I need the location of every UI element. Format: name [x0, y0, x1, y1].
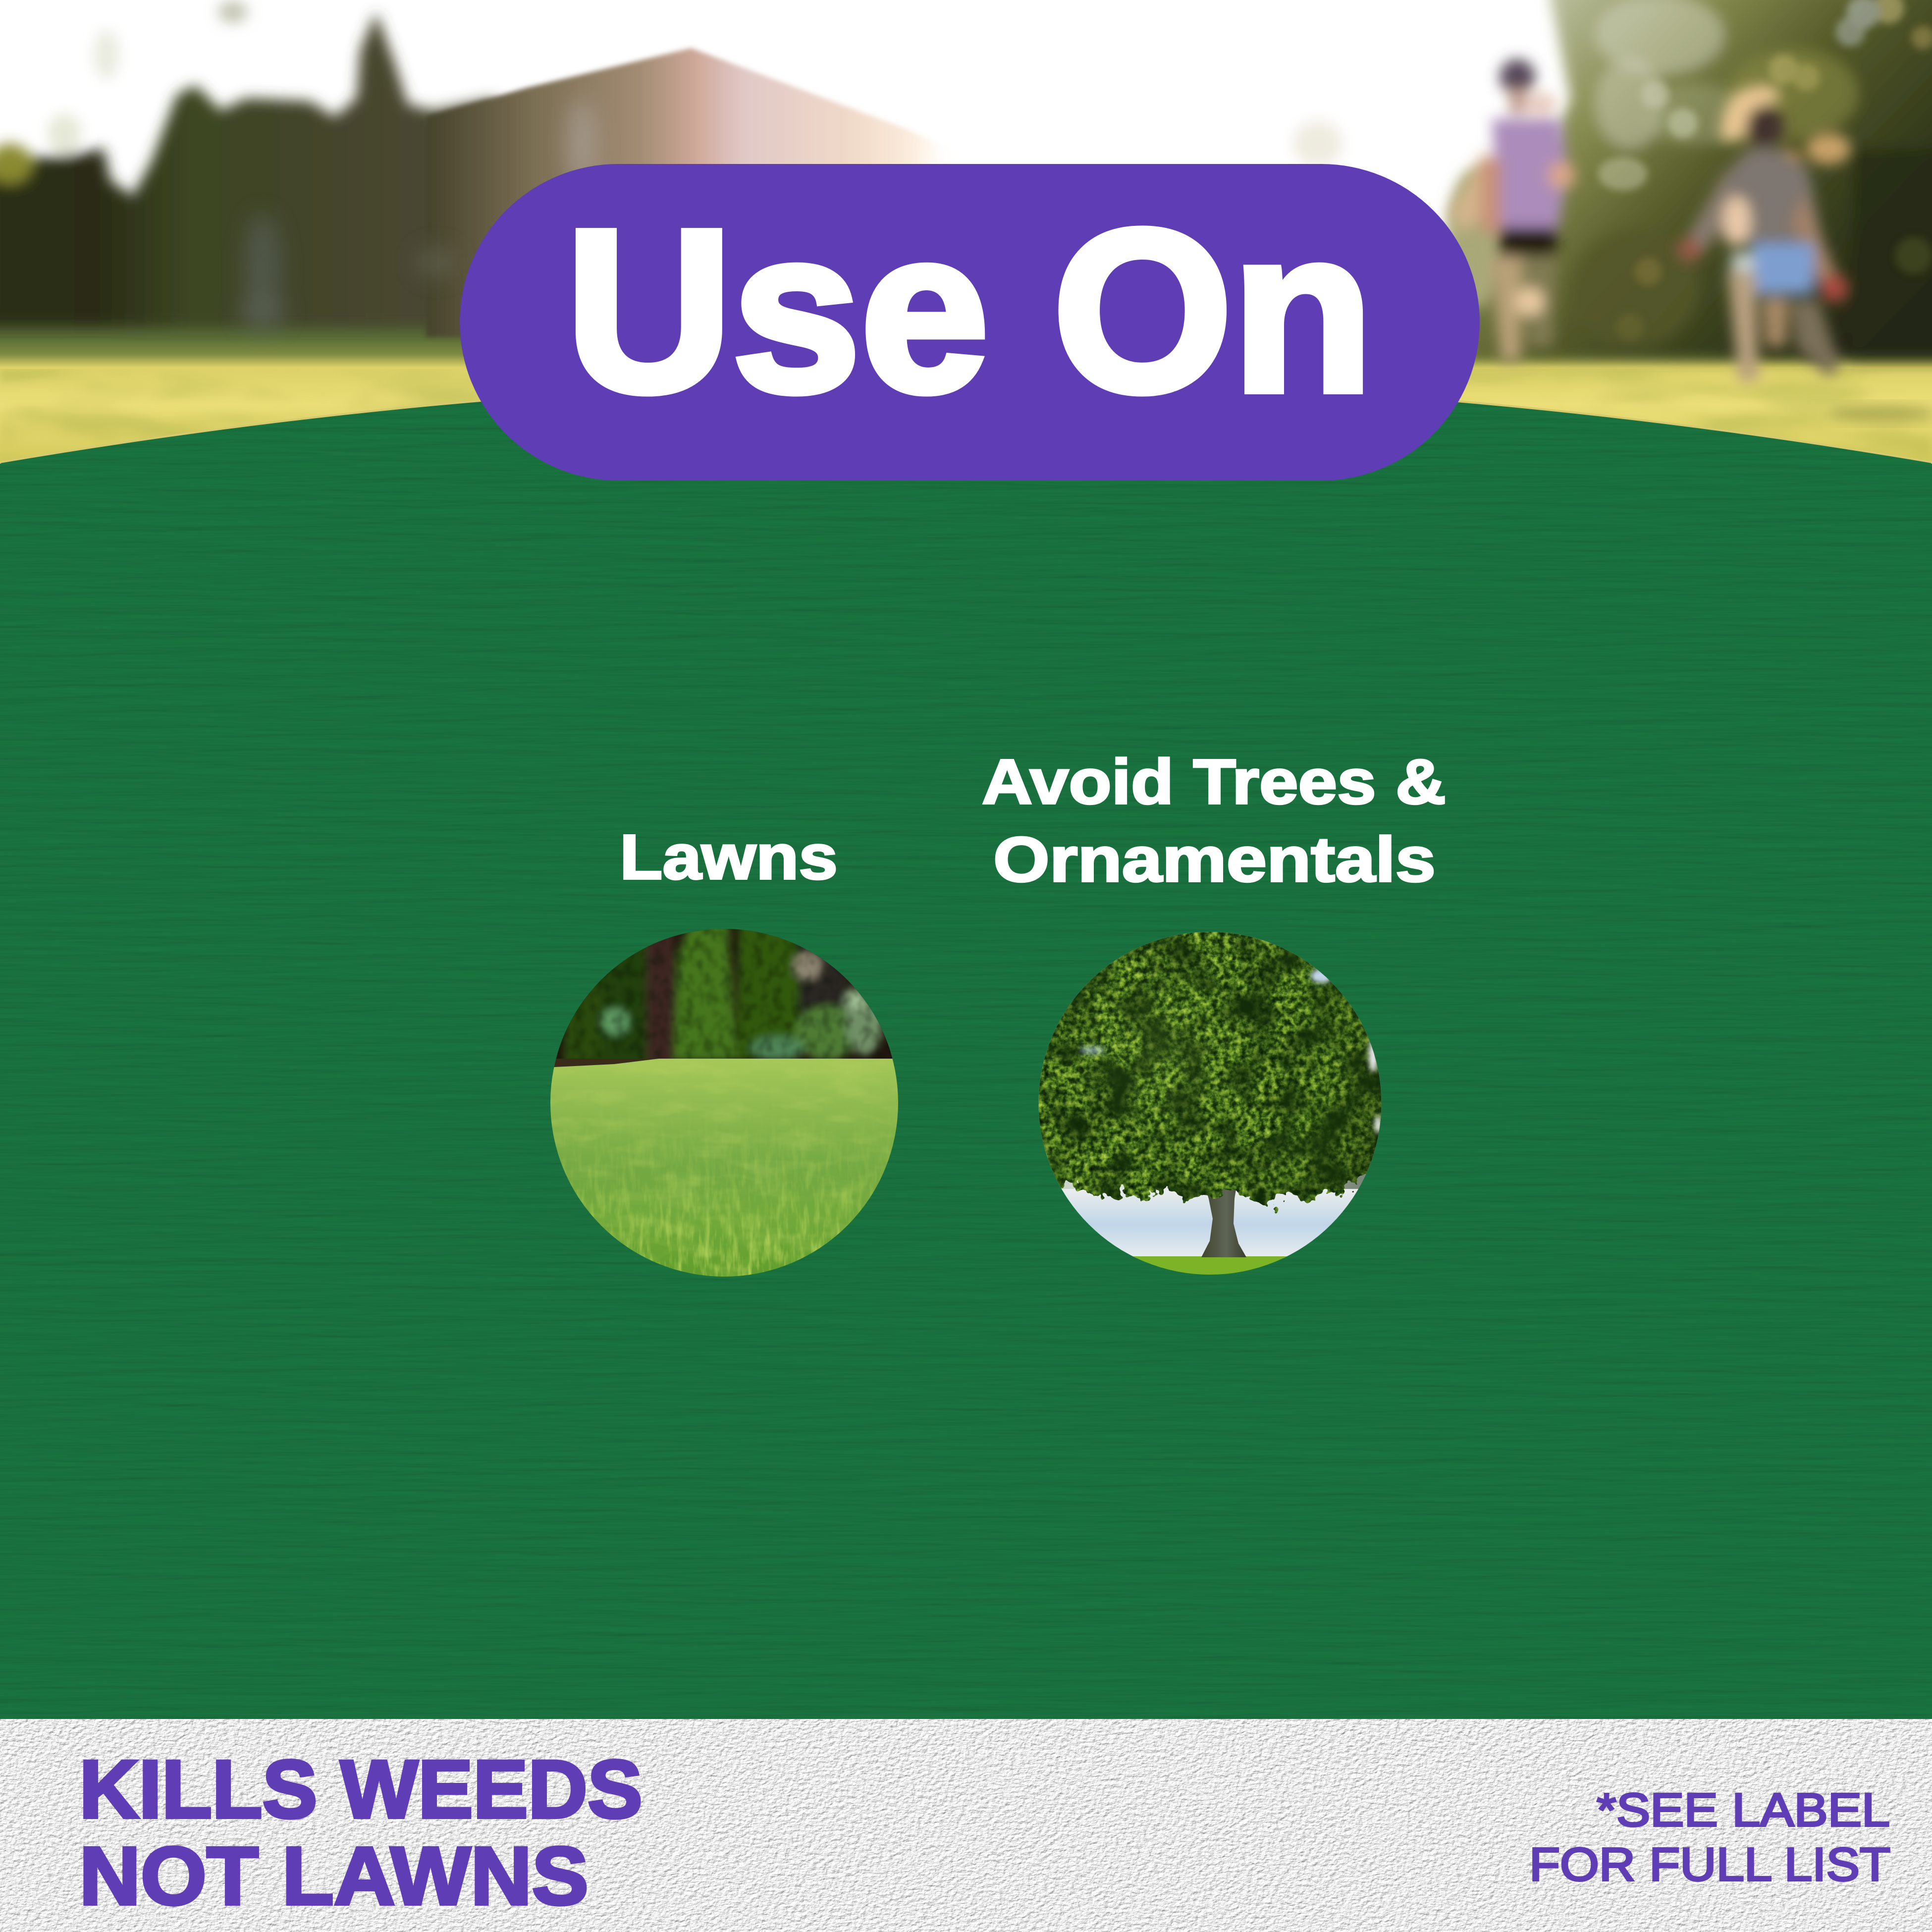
slogan: NOT LAWNS: [79, 1830, 589, 1922]
left tree line: [0, 1, 495, 327]
slogan: [79, 1744, 643, 1922]
photo circle: oak tree: [1038, 932, 1381, 1275]
title pill: [460, 164, 1480, 481]
canopy shading: [1035, 926, 1387, 1189]
grass: [0, 307, 1932, 495]
faint distant tree: [1293, 121, 1342, 166]
grass shadow: [1828, 406, 1932, 422]
ground: [1035, 1256, 1387, 1281]
sun glow: [926, 99, 1045, 218]
see label note: [1529, 1784, 1890, 1891]
sky: [1035, 926, 1387, 1258]
background photo: blurred backyard with children: [0, 0, 1932, 495]
child running, lilac shirt: [1449, 59, 1575, 362]
see label note: FOR FULL LIST: [1529, 1838, 1890, 1891]
child running, blonde hair: [1677, 85, 1851, 381]
slogan: KILLS WEEDS: [79, 1744, 643, 1835]
label: lawns: Lawns: [620, 822, 838, 893]
bottom plaster band: [0, 1719, 1932, 1932]
right tree canopy: [1447, 0, 1932, 362]
green curved panel: [0, 297, 1932, 1724]
trunk: [1201, 1174, 1246, 1257]
see label note: *SEE LABEL: [1597, 1784, 1890, 1836]
leaf canopy: [1020, 912, 1402, 1204]
photo circle: lawn: [545, 921, 907, 1279]
house with glowing gable: [426, 48, 996, 337]
pale reflections on tree line and house: [240, 99, 597, 329]
bokeh highlights: [1598, 0, 1932, 341]
label: avoid trees and ornamentals: Ornamentals: [993, 824, 1436, 895]
title text: Use On: [566, 182, 1373, 439]
label: avoid trees and ornamentals: Avoid Trees &: [982, 747, 1446, 817]
sky gaps in canopy: [1079, 969, 1382, 1133]
label: avoid trees and ornamentals: [982, 747, 1446, 895]
